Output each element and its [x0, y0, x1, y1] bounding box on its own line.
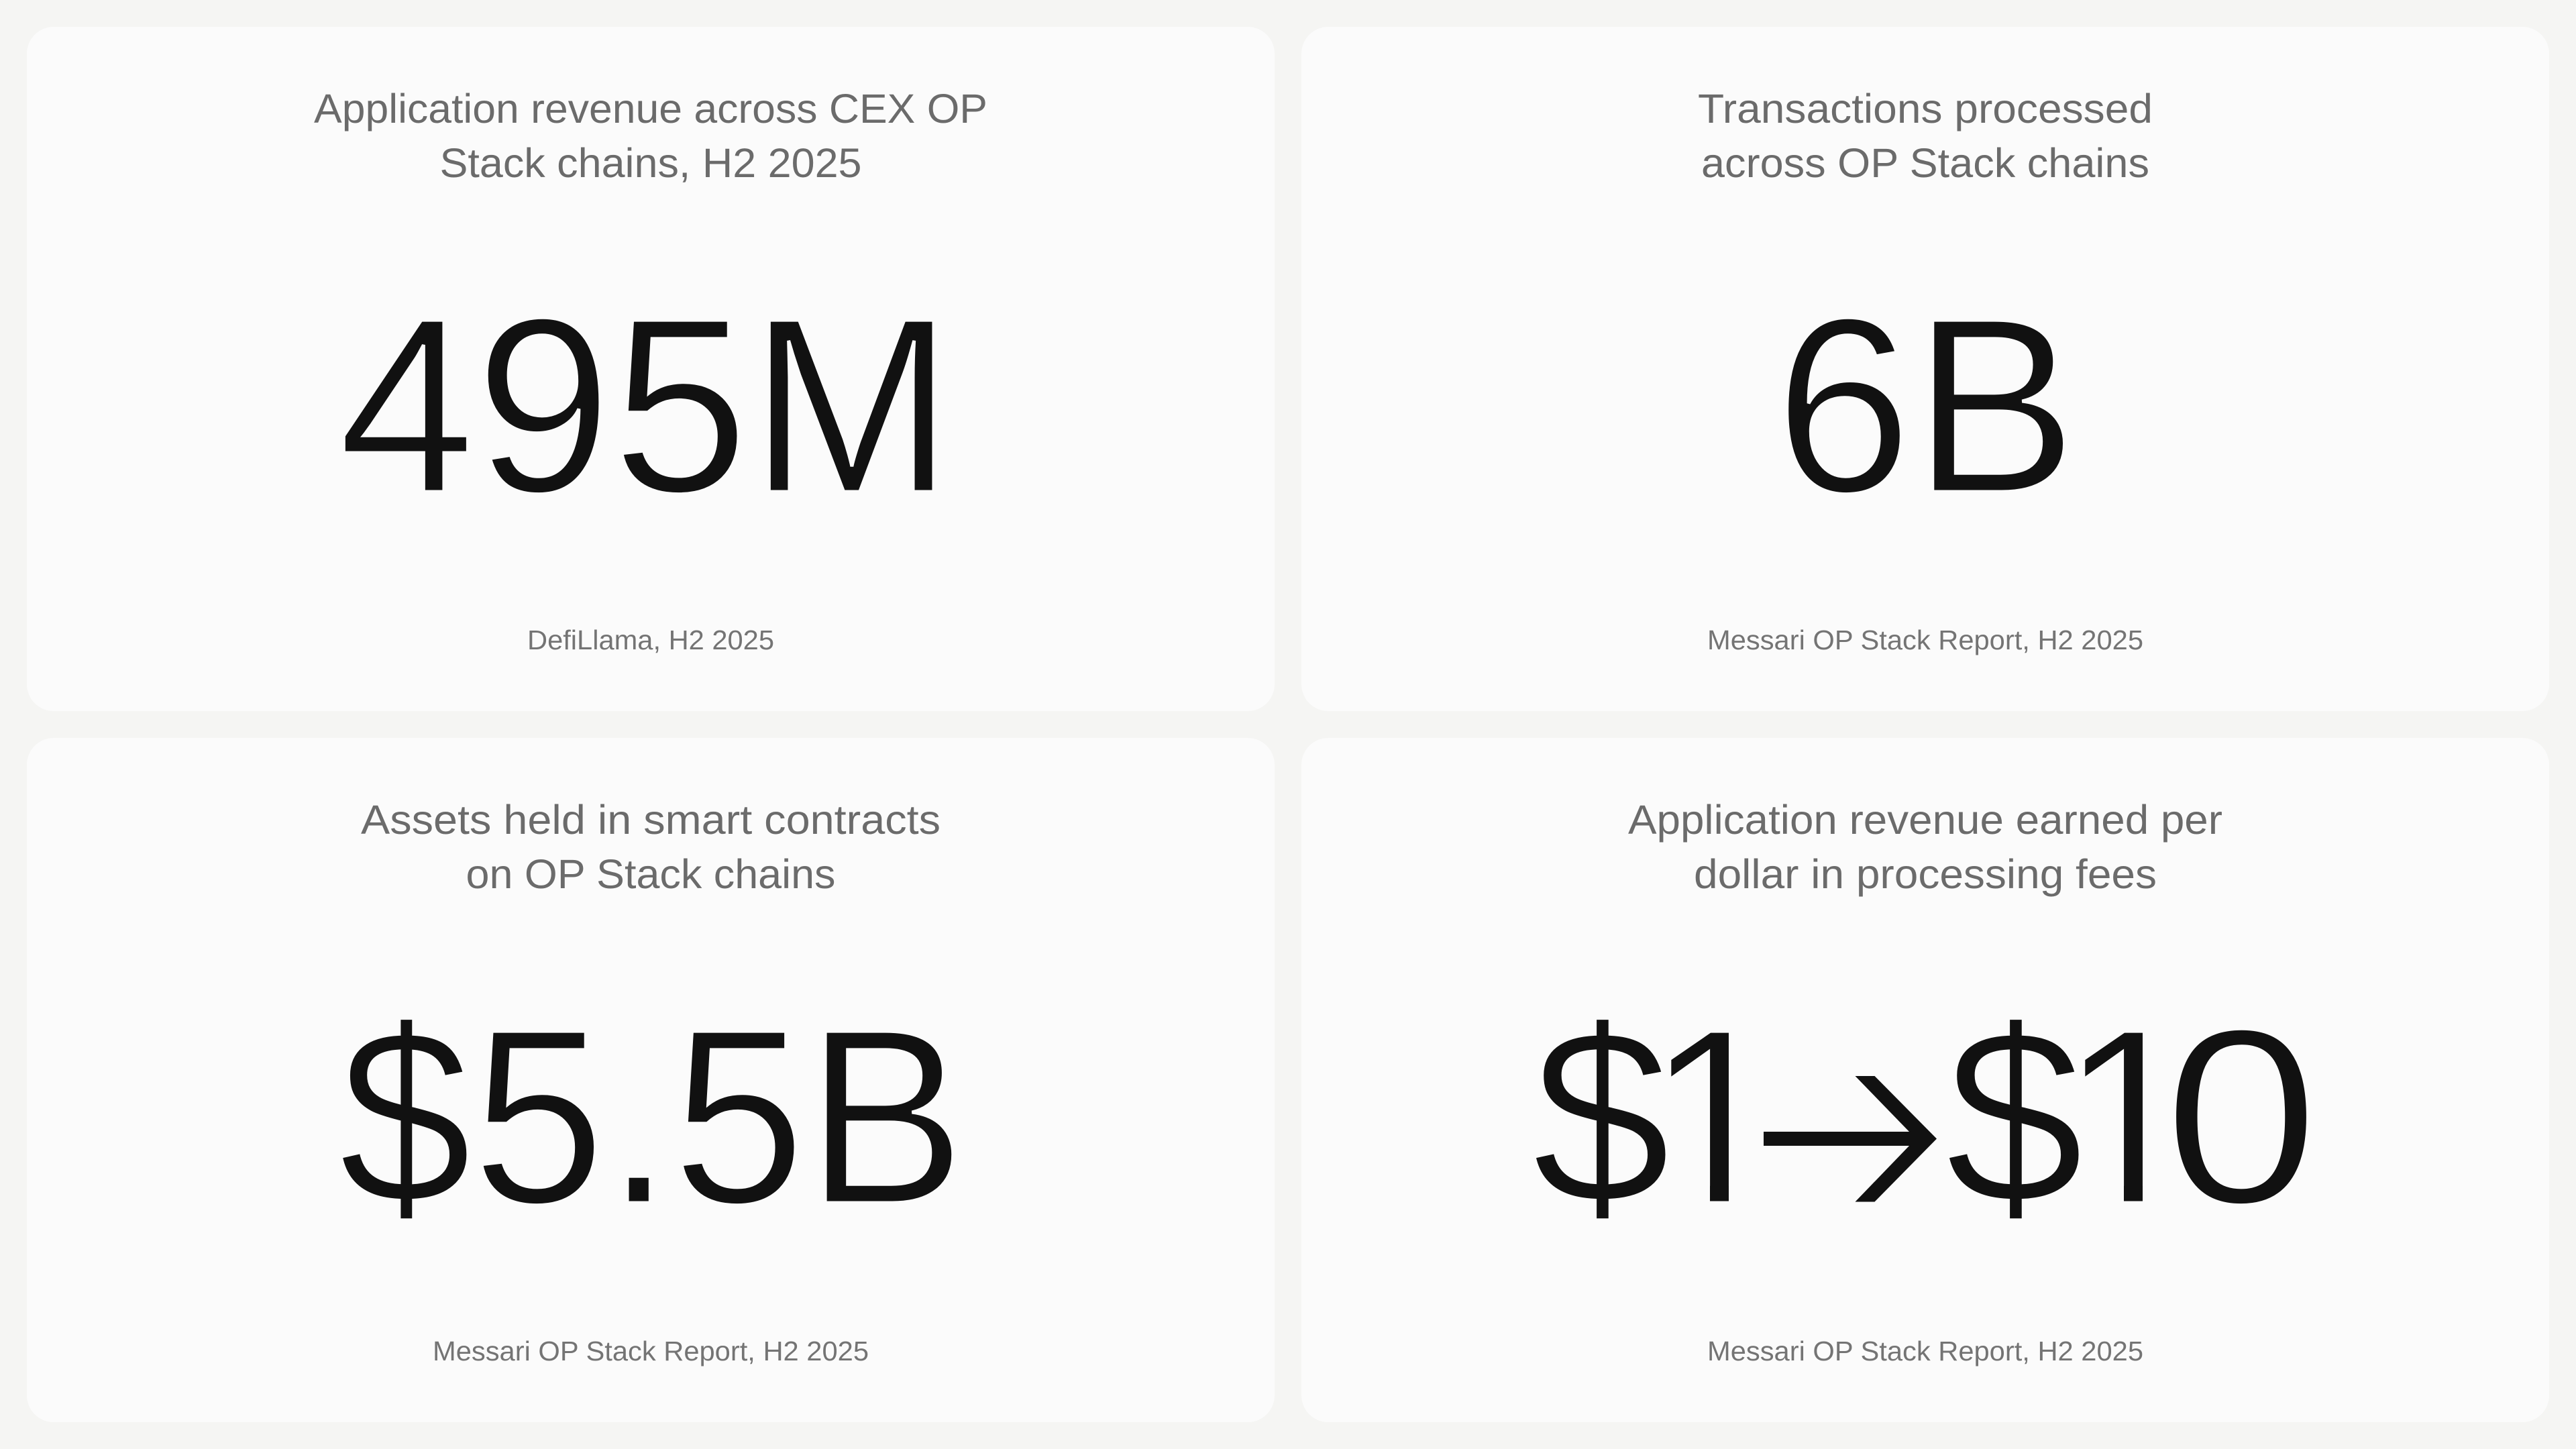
panel: CEX application revenue [27, 27, 1275, 711]
heading: dollar in processing fees [1694, 851, 2157, 897]
source: Messari OP Stack Report, H2 2025 [1707, 1336, 2143, 1366]
big number: to value [1949, 1020, 2306, 1218]
source: Messari OP Stack Report, H2 2025 [433, 1336, 869, 1366]
heading [1628, 797, 2222, 897]
panel: transactions processed [1301, 27, 2549, 711]
source: Messari OP Stack Report, H2 2025 [1707, 625, 2143, 655]
heading: across OP Stack chains [1701, 140, 2149, 186]
big number: 6B [1774, 266, 2078, 545]
heading: Assets held in smart contracts [361, 797, 941, 843]
heading: Application revenue earned per [1628, 797, 2222, 843]
heading: on OP Stack chains [466, 851, 836, 897]
big number: 495M [338, 266, 954, 545]
source: DefiLlama, H2 2025 [527, 625, 774, 655]
big number: to value: 1 [2059, 977, 2198, 1256]
big number: from value: $ [1532, 977, 1671, 1256]
arrow [1764, 1076, 1937, 1202]
heading [361, 797, 941, 897]
heading [314, 86, 987, 186]
big number: from value [1536, 1020, 1729, 1218]
big number: from value: 1 [1646, 977, 1784, 1256]
panel: assets in smart contracts [27, 738, 1275, 1422]
big number: $5.5B [338, 977, 966, 1256]
heading: Transactions processed [1698, 86, 2153, 131]
heading: Stack chains, H2 2025 [440, 140, 861, 186]
heading [1698, 86, 2153, 186]
card background [27, 738, 1275, 1422]
card background [27, 27, 1275, 711]
big number: to value: 0 [2163, 977, 2319, 1256]
big number: to value: $ [1945, 977, 2084, 1256]
panel: revenue per dollar of fees [1536, 804, 2306, 1366]
card background [1301, 27, 2549, 711]
heading: Application revenue across CEX OP [314, 86, 987, 131]
card background [1301, 738, 2549, 1422]
